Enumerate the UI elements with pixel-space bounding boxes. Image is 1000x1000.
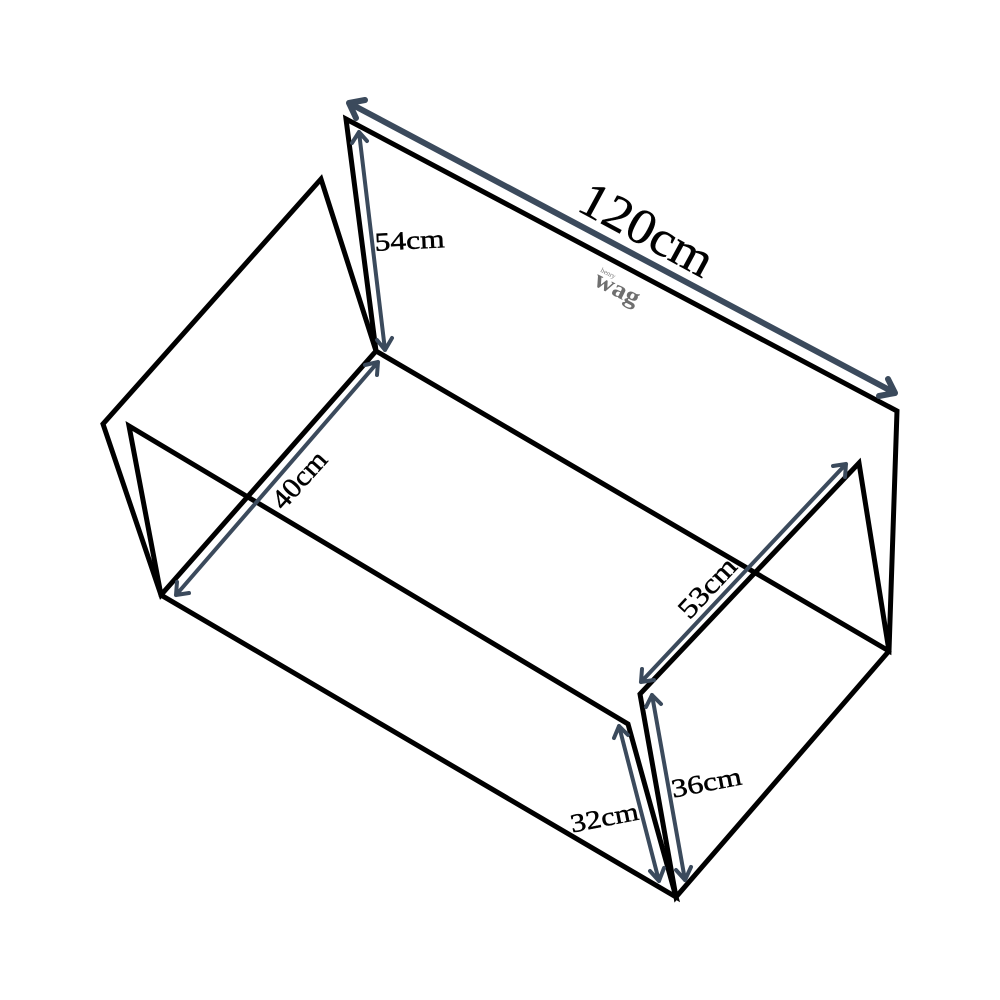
arrow: 40cm width	[176, 362, 378, 595]
arrow: 120cm length	[349, 100, 895, 396]
arrow: 54cm back height	[352, 132, 392, 350]
label: 120cm: 120cm	[570, 170, 724, 288]
logo: henry wag: henry	[599, 266, 617, 281]
arrow: 36cm right height	[646, 695, 691, 880]
label: 32cm: 32cm	[568, 797, 641, 838]
panel: right wall	[640, 463, 889, 897]
label: 53cm: 53cm	[672, 551, 744, 625]
label: 40cm: 40cm	[265, 445, 334, 516]
arrow: 53cm top width	[641, 464, 846, 682]
panel: back wall	[346, 119, 897, 651]
panel: front wall	[129, 426, 676, 897]
logo: henry wag: wag	[590, 266, 645, 312]
label: 54cm: 54cm	[374, 224, 445, 257]
arrow: 32cm front height	[614, 726, 664, 881]
label: 36cm: 36cm	[669, 762, 744, 804]
panel: left wall	[103, 179, 376, 595]
